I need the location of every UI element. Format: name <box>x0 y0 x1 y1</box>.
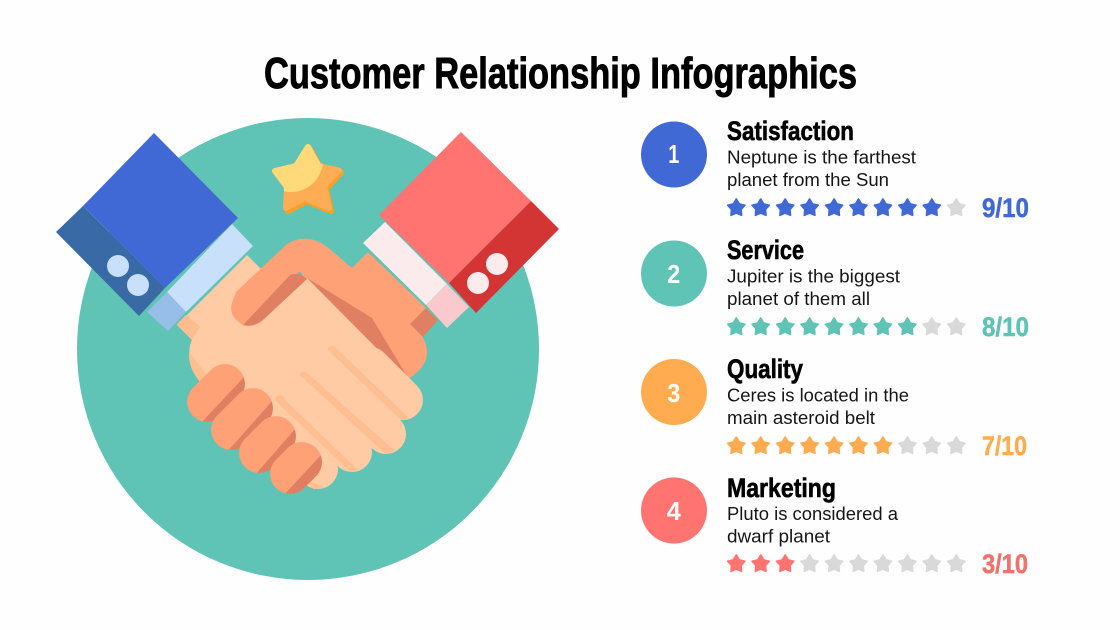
badge 2: 2 <box>667 259 680 289</box>
heading: Quality <box>727 354 803 384</box>
description: Jupiter is the biggest <box>727 266 900 286</box>
heading: Service <box>727 235 804 265</box>
star rating 7 of 10 <box>728 437 965 453</box>
description: main asteroid belt <box>727 408 875 428</box>
panel: quality <box>641 354 1027 461</box>
description: Neptune is the farthest <box>727 148 916 168</box>
panel: marketing <box>641 473 1028 579</box>
description: Ceres is located in the <box>727 386 909 406</box>
right wrist and back of hand <box>300 240 438 378</box>
left wrist <box>177 255 262 340</box>
description: dwarf planet <box>727 526 830 546</box>
description: planet of them all <box>727 289 870 309</box>
description <box>727 266 900 309</box>
score: 3/10 <box>982 549 1028 579</box>
left blue cuff <box>56 133 253 331</box>
description <box>727 148 916 190</box>
badge 2 <box>641 240 707 306</box>
right red cuff <box>363 132 559 328</box>
title: Customer Relationship Infographics <box>264 49 857 98</box>
left hand fingers <box>187 364 322 494</box>
panel: satisfaction <box>641 116 1029 223</box>
badge 4 <box>641 478 707 544</box>
teal circle backdrop <box>77 118 539 580</box>
score: 8/10 <box>982 312 1029 342</box>
badge 3: 3 <box>667 378 680 408</box>
icon: star <box>275 147 341 211</box>
heading: Marketing <box>727 473 836 503</box>
badge 4: 4 <box>667 496 681 526</box>
score: 7/10 <box>982 431 1027 461</box>
badge 1: 1 <box>668 139 679 169</box>
description: planet from the Sun <box>727 170 889 190</box>
star rating 8 of 10 <box>728 318 965 334</box>
description <box>727 504 899 546</box>
panel: service <box>641 235 1029 342</box>
light hand with fingers <box>189 268 418 489</box>
badge 3 <box>641 359 707 425</box>
heading: Satisfaction <box>727 116 854 146</box>
thumb <box>231 239 345 326</box>
score: 9/10 <box>982 193 1029 223</box>
badge 1 <box>641 122 707 188</box>
description: Pluto is considered a <box>727 504 899 524</box>
description <box>727 386 909 428</box>
icon: handshake <box>56 132 559 500</box>
star rating 9 of 10 <box>728 199 965 215</box>
star rating 3 of 10 <box>728 555 965 571</box>
